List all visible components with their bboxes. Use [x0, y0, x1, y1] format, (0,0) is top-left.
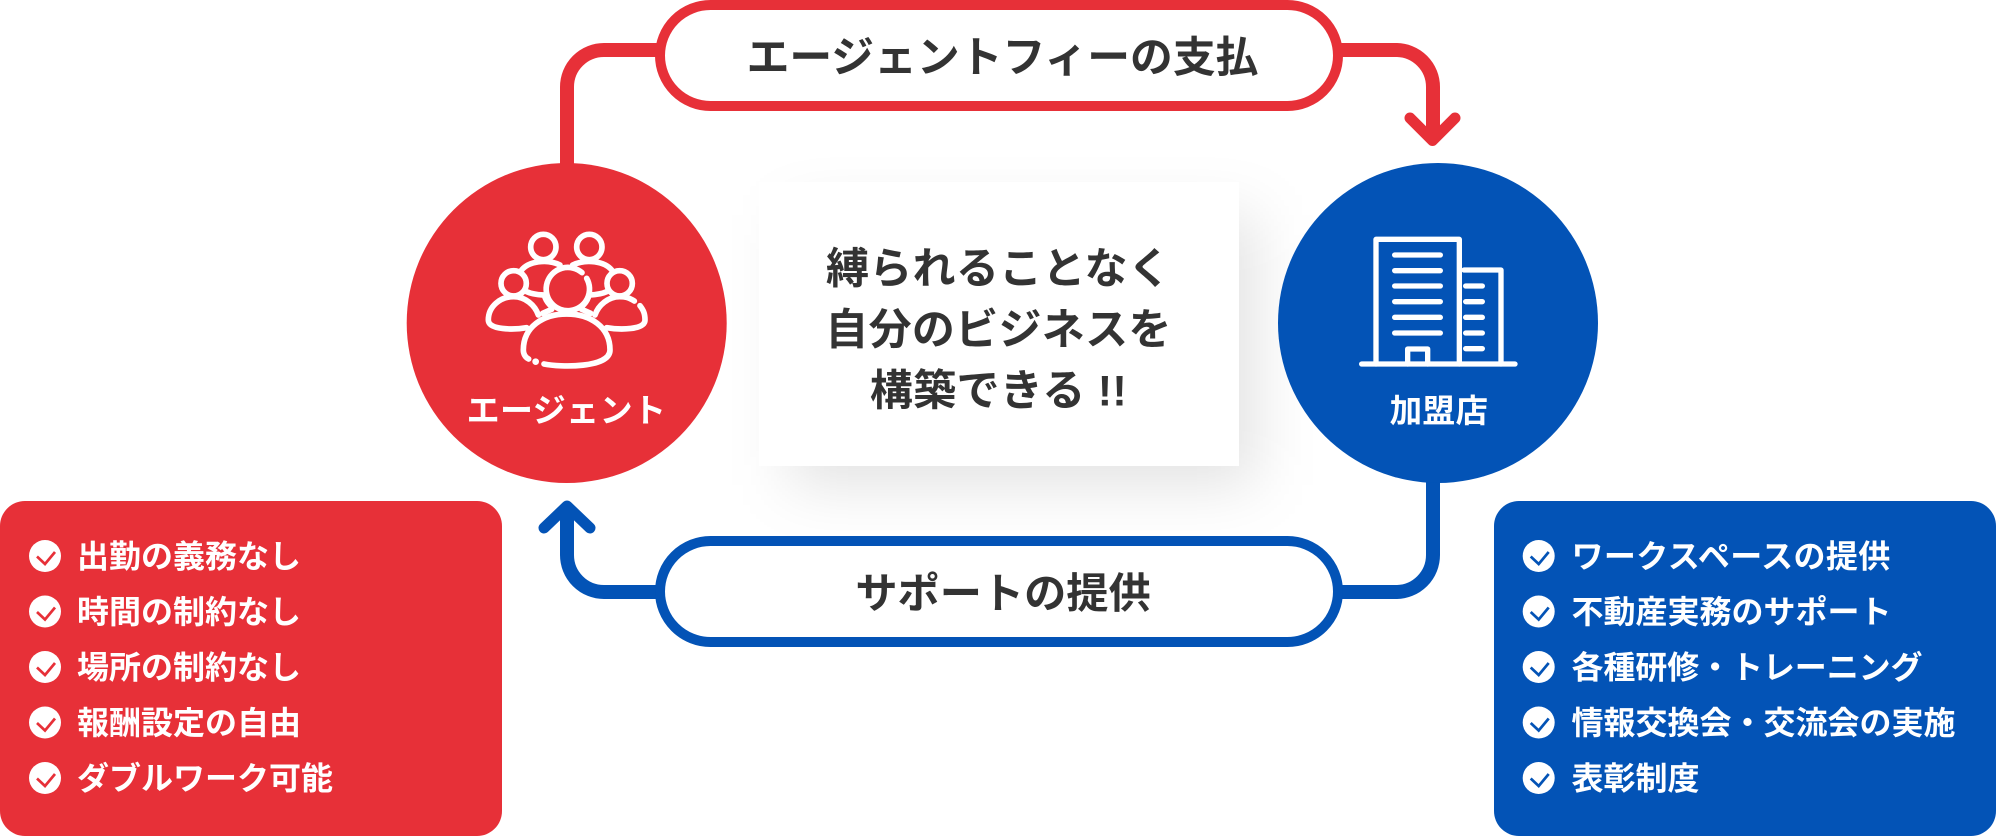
list item: real estate support: 不動産実務のサポート	[1572, 594, 1892, 630]
list item: training: 各種研修・トレーニング	[1572, 650, 1923, 686]
list item: information exchange: 情報交換会・交流会の実施	[1572, 705, 1956, 741]
list item: workspace: ワークスペースの提供	[1572, 538, 1891, 574]
list item: no location constraints: 場所の制約なし	[77, 650, 301, 686]
circle: agent: エージェント	[467, 392, 666, 429]
center message card: 構築できる !!	[870, 368, 1127, 416]
list item: no attendance duty: 出勤の義務なし	[77, 538, 301, 574]
center message card	[759, 182, 1239, 466]
list item: double work allowed: ダブルワーク可能	[77, 760, 333, 796]
arrow: support flow to agent	[544, 480, 1433, 592]
pill: agent fee payment: エージェントフィーの支払	[747, 34, 1258, 82]
pill: agent fee payment	[660, 5, 1338, 106]
list item: free compensation setting: 報酬設定の自由	[77, 705, 301, 741]
list item: awards: 表彰制度	[1572, 760, 1700, 796]
pill: support provision	[660, 541, 1338, 642]
circle: member store	[1278, 163, 1598, 483]
panel: member store support	[1494, 501, 1996, 836]
center message card: 縛られることなく	[826, 246, 1171, 294]
icon: office buildings	[1362, 239, 1515, 364]
center message card: 自分のビジネスを	[825, 306, 1172, 354]
circle: member store: 加盟店	[1390, 393, 1488, 429]
panel: agent benefits	[0, 501, 502, 836]
list item: no time constraints: 時間の制約なし	[77, 594, 301, 630]
arrow: agent fee flow to member store	[567, 50, 1455, 170]
pill: support provision: サポートの提供	[855, 570, 1151, 617]
circle: agent	[407, 163, 727, 483]
center card shadow	[790, 215, 1255, 485]
icon: group of people	[488, 234, 645, 366]
